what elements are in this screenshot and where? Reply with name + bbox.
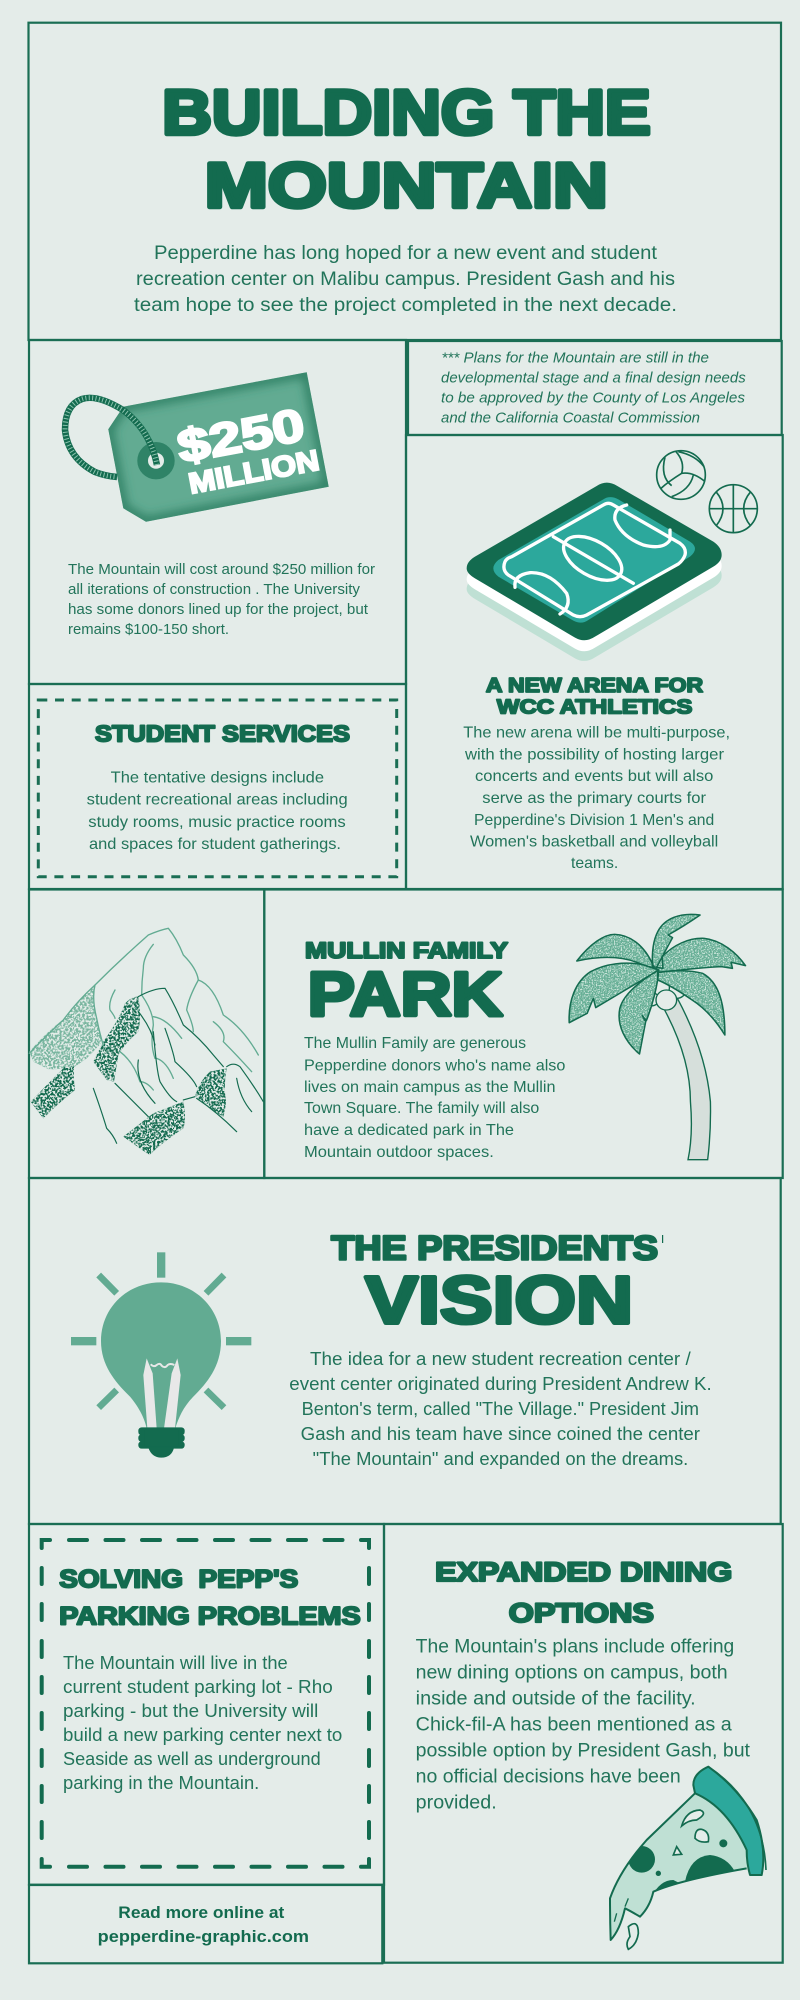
cost text: all iterations of construction . The University <box>68 581 360 598</box>
parking heading <box>59 1567 361 1631</box>
intro text <box>134 243 677 316</box>
read more text: Read more online at <box>118 1903 285 1922</box>
cost text: remains $100-150 short. <box>68 621 229 638</box>
panel: dining <box>384 1524 783 1963</box>
vision text: The idea for a new student recreation center / <box>310 1349 691 1369</box>
park heading: PARK <box>308 961 503 1030</box>
dashed frame <box>38 700 397 877</box>
note text: *** Plans for the Mountain are still in the <box>442 350 709 367</box>
park text: Mountain outdoor spaces. <box>304 1144 494 1161</box>
tag amount: $250 <box>173 398 309 473</box>
vision heading: THE PRESIDENTS <box>331 1230 658 1268</box>
dining text: new dining options on campus, both <box>416 1663 728 1684</box>
panel: disclaimer note <box>408 341 782 435</box>
icon: pizza slice <box>610 1767 766 1949</box>
vision text: "The Mountain" and expanded on the dreams. <box>313 1449 688 1469</box>
icon: light bulb <box>71 1252 251 1458</box>
icon: price tag <box>65 372 329 522</box>
arena heading <box>486 675 704 718</box>
parking text: Seaside as well as underground <box>63 1749 321 1769</box>
arena heading: WCC ATHLETICS <box>497 696 692 718</box>
dining text: inside and outside of the facility. <box>416 1689 696 1710</box>
park heading: MULLIN FAMILY <box>305 938 508 963</box>
dining heading: OPTIONS <box>509 1598 654 1628</box>
panel: arena <box>406 435 783 889</box>
student services text <box>87 770 348 853</box>
read more text: pepperdine-graphic.com <box>98 1927 309 1946</box>
parking text: The Mountain will live in the <box>63 1653 288 1673</box>
parking text: build a new parking center next to <box>63 1725 342 1745</box>
dining heading <box>435 1557 732 1628</box>
read more text <box>98 1903 309 1946</box>
student services text: and spaces for student gatherings. <box>89 836 341 853</box>
icon: basketball <box>709 485 757 533</box>
cost text: has some donors lined up for the project, but <box>68 601 369 618</box>
park text: lives on main campus as the Mullin <box>304 1079 556 1096</box>
parking text: parking - but the University will <box>63 1701 318 1721</box>
intro text: team hope to see the project completed in the next decade. <box>134 295 677 316</box>
vision text: event center originated during President Andrew K. <box>289 1374 712 1394</box>
title: BUILDING THE <box>162 78 651 148</box>
panel: title <box>28 23 781 340</box>
intro text: recreation center on Malibu campus. President Gash and his <box>136 269 675 290</box>
panel: student services <box>29 684 406 889</box>
dining text: Chick-fil-A has been mentioned as a <box>416 1715 732 1736</box>
note text <box>441 350 746 427</box>
arena heading: A NEW ARENA FOR <box>486 675 704 697</box>
parking heading: SOLVING PEPP'S <box>59 1567 298 1594</box>
park text: have a dedicated park in The <box>304 1122 514 1139</box>
park heading <box>305 938 508 1030</box>
arena text: Pepperdine's Division 1 Men's and <box>474 812 714 829</box>
arena text: with the possibility of hosting larger <box>464 746 725 763</box>
arena text: serve as the primary courts for <box>482 790 707 807</box>
icon: mountain sketch <box>29 928 263 1155</box>
arena text: concerts and events but will also <box>475 768 713 785</box>
note text: and the California Coastal Commission <box>441 410 700 427</box>
panel: presidents vision <box>29 1178 781 1524</box>
park text <box>304 1035 566 1161</box>
dining text: The Mountain's plans include offering <box>416 1637 734 1658</box>
student services heading: STUDENT SERVICES <box>95 721 350 747</box>
tag amount <box>173 397 322 501</box>
cost text <box>68 561 375 638</box>
dashed frame <box>42 1540 369 1867</box>
panel: mullin family park <box>264 890 783 1178</box>
vision text <box>289 1349 712 1469</box>
arena text: The new arena will be multi-purpose, <box>463 725 730 742</box>
note text: developmental stage and a final design needs <box>441 370 746 387</box>
arena text: Women's basketball and volleyball <box>470 833 718 850</box>
tag amount: MILLION <box>186 445 322 501</box>
vision text: Benton's term, called "The Village." President Jim <box>302 1399 699 1419</box>
parking text: parking in the Mountain. <box>63 1773 259 1793</box>
panel: parking <box>29 1524 384 1885</box>
parking heading: PARKING PROBLEMS <box>59 1604 361 1631</box>
parking text <box>63 1653 342 1793</box>
dining text: possible option by President Gash, but <box>416 1741 751 1762</box>
park text: The Mullin Family are generous <box>304 1035 526 1052</box>
note text: to be approved by the County of Los Angeles <box>441 390 745 407</box>
student services text: student recreational areas including <box>87 792 348 809</box>
parking text: current student parking lot - Rho <box>63 1677 333 1697</box>
title: MOUNTAIN <box>205 151 608 221</box>
title <box>162 78 651 221</box>
student services text: The tentative designs include <box>111 770 324 787</box>
dining text <box>416 1637 751 1814</box>
park text: Town Square. The family will also <box>304 1100 539 1117</box>
arena text: teams. <box>571 855 618 872</box>
icon: volleyball <box>657 451 705 499</box>
park text: Pepperdine donors who's name also <box>304 1057 566 1074</box>
panel: cost <box>29 340 406 684</box>
dining text: no official decisions have been <box>416 1767 681 1788</box>
icon: palm tree <box>569 914 746 1160</box>
panel: read more <box>29 1885 382 1963</box>
vision heading: VISION <box>365 1263 633 1338</box>
cost text: The Mountain will cost around $250 million for <box>68 561 375 578</box>
vision text: Gash and his team have since coined the center <box>301 1424 700 1444</box>
icon: isometric court <box>467 483 722 661</box>
arena text <box>463 725 730 872</box>
intro text: Pepperdine has long hoped for a new event and student <box>154 243 658 264</box>
student services text: study rooms, music practice rooms <box>88 814 346 831</box>
vision heading <box>331 1230 663 1338</box>
dining text: provided. <box>416 1793 497 1814</box>
dining heading: EXPANDED DINING <box>435 1557 732 1587</box>
panel: mountain illustration <box>29 890 264 1178</box>
